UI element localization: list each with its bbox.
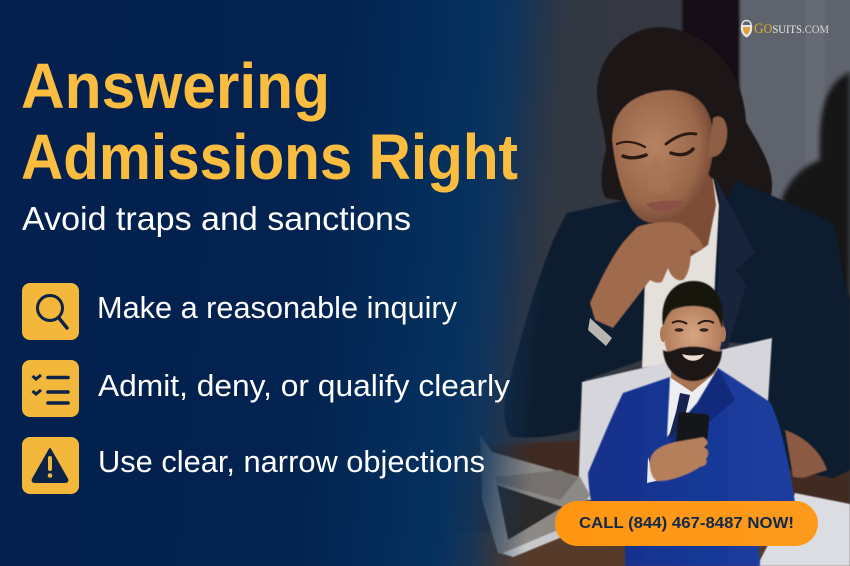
call to action button: CALL (844) 467-8487 NOW! xyxy=(579,515,794,532)
item text: Use clear, narrow objections xyxy=(98,444,485,479)
man neck xyxy=(671,362,716,392)
woman jacket xyxy=(504,180,850,478)
left navy gradient panel xyxy=(0,0,600,566)
title: Admissions Right xyxy=(21,121,518,193)
title: Answering xyxy=(21,50,330,122)
woman hand and forearm xyxy=(590,222,703,328)
man in blue suit xyxy=(588,281,795,566)
woman face xyxy=(612,90,713,223)
photo: office background xyxy=(440,0,850,566)
man hair xyxy=(662,281,723,328)
logo wordmark: GOSUITS.COM xyxy=(754,21,829,37)
woman ear xyxy=(708,116,727,157)
woman eyes and brows xyxy=(617,134,696,158)
item: admit or deny xyxy=(22,360,511,417)
icon: warning triangle xyxy=(22,437,79,494)
item: reasonable inquiry xyxy=(22,283,457,340)
man shirt xyxy=(667,368,718,437)
photo: white document xyxy=(578,338,772,500)
woman sleeve cuff xyxy=(588,318,612,346)
man lapel shading xyxy=(668,368,735,470)
man jacket xyxy=(588,368,795,566)
photo: background silhouette xyxy=(782,72,850,300)
woman hair xyxy=(597,27,772,204)
photo: paper stack xyxy=(757,493,850,566)
man beard xyxy=(663,347,722,381)
call to action button xyxy=(555,501,818,546)
photo: woman at desk xyxy=(504,27,850,478)
woman mouth xyxy=(646,201,683,211)
item text: Admit, deny, or qualify clearly xyxy=(98,368,511,403)
icon: padlock shield xyxy=(741,20,752,38)
woman nose shadow xyxy=(648,155,672,194)
man phone xyxy=(675,412,710,450)
woman shirt xyxy=(642,178,719,368)
woman right hand xyxy=(785,430,827,478)
title xyxy=(21,50,518,193)
subtitle: Avoid traps and sanctions xyxy=(22,200,411,237)
item text: Make a reasonable inquiry xyxy=(97,290,457,325)
icon: checklist xyxy=(22,360,79,417)
item: narrow objections xyxy=(22,437,485,494)
man smile xyxy=(682,354,704,361)
man ears xyxy=(660,326,726,342)
man shirt cuff xyxy=(647,457,660,483)
man hand xyxy=(650,437,708,481)
man eyes and brows xyxy=(672,321,714,332)
man tie xyxy=(668,393,690,440)
woman lapel xyxy=(712,177,755,368)
logo: Gosuits.com xyxy=(741,20,829,38)
icon: magnifying glass xyxy=(22,283,79,340)
photo: laptop xyxy=(480,435,590,557)
man face xyxy=(663,305,723,380)
woman neck xyxy=(652,170,716,262)
